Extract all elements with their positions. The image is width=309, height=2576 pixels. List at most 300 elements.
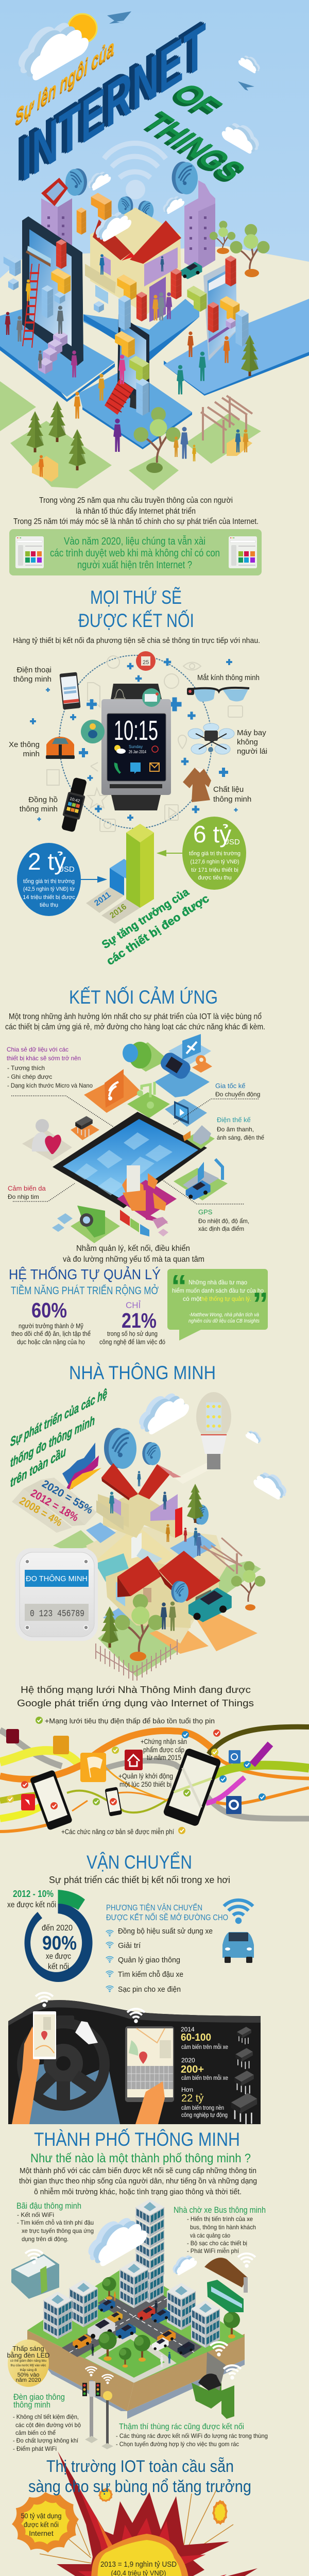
tower block — [135, 2199, 164, 2282]
year pad 2011 — [86, 887, 124, 913]
dotted arc — [59, 655, 212, 828]
rays — [40, 2490, 233, 2576]
list: vehicle benefits: Tìm kiếm chỗ đậu xe — [118, 1970, 183, 1979]
purple towers — [41, 180, 215, 319]
heading: everything connected — [78, 587, 194, 631]
caption: smart home growth: thống đo thông minh — [10, 1413, 95, 1470]
date: 26 Jan 2014 — [129, 750, 146, 754]
calendar circle: 25 — [143, 659, 149, 666]
title: Sự lên ngôi của — [15, 34, 114, 132]
low rise wide — [119, 2261, 164, 2308]
fence — [96, 1639, 177, 1681]
market figures: 2013 = 1,9 nghìn tỷ USD — [100, 2560, 177, 2569]
callout: 2 billion: (42,5 nghìn tỷ VNĐ) từ — [23, 886, 75, 892]
label: data sharing: - Ghi chép được — [7, 1073, 52, 1080]
title: THINGS: THINGS — [134, 108, 252, 187]
building back right — [167, 2283, 196, 2330]
wifi big symbol — [104, 143, 166, 199]
stat: 60 percent: dục hoặc cân nặng của họ — [17, 1338, 85, 1346]
ribbon notes: +Chứng nhận sản — [141, 1737, 187, 1745]
sensor stats: 2014 — [181, 2026, 195, 2033]
icon: fitness band — [59, 776, 89, 833]
cloud over home — [139, 1383, 189, 1437]
meter label: ĐO THÔNG MINH — [26, 1574, 88, 1583]
building front left — [43, 2292, 72, 2339]
screws — [25, 1560, 88, 1630]
ribbon notes: một lúc 250 thiết bị — [119, 1780, 171, 1788]
heading: connected vehicles: ĐƯỢC KẾT NỐI SẼ MỞ ĐƯỜNG CHO — [106, 1912, 228, 1922]
airplane 2 — [238, 81, 254, 91]
small blasts — [36, 2488, 252, 2576]
game tile — [154, 1050, 210, 1097]
label: smart trash: - Chọn tuyến đường hợp lý cho việc thu gom rác — [116, 2441, 239, 2448]
quote attribution: nghiên cứu dữ liệu của CB Insights — [188, 1318, 260, 1324]
stat: 60 percent: theo dõi chế độ ăn, lịch tập thể — [11, 1330, 91, 1337]
gold LED badge: Thấp sáng — [12, 2345, 44, 2352]
park — [85, 2330, 177, 2383]
label: skin sensor: Đo nhịp tim — [8, 1193, 39, 1200]
sensor stats: 22 tỷ — [181, 2093, 203, 2104]
dumpster — [192, 2352, 234, 2419]
ground — [0, 246, 309, 487]
label: smart parking: - Kết nối WiFi — [17, 2211, 54, 2218]
stat: 21 percent: công nghệ để làm việc đó — [99, 1338, 165, 1346]
small cloud city — [173, 2250, 197, 2277]
close quote: ” — [252, 1286, 268, 1322]
list: vehicle benefits — [106, 1927, 213, 1994]
ribbon notes: từ năm 2015 — [147, 1753, 181, 1761]
explosion — [8, 2451, 258, 2576]
benches — [32, 435, 252, 482]
label: smart watch — [20, 795, 58, 814]
label: accelerometer: Gia tốc kế — [215, 1082, 246, 1090]
title: OF: OF — [165, 78, 230, 122]
house centre — [85, 208, 181, 322]
smart city text: Một thành phố với các cảm biến được kết nối sẽ cung cấp những thông tin — [20, 2166, 256, 2175]
gold LED badge: năm 2020 — [16, 2377, 41, 2383]
sun — [68, 14, 97, 43]
donut chart: kết nối — [48, 1962, 69, 1971]
tiles lower — [52, 1213, 168, 1236]
label: accelerometer: Đo chuyển động — [215, 1091, 260, 1098]
stairs — [38, 331, 67, 374]
faint background icons — [47, 656, 243, 832]
stat: 60 percent: người trưởng thành ở Mỹ — [19, 1322, 83, 1330]
cloud over house — [96, 205, 131, 243]
market figures — [100, 2560, 177, 2576]
sensor stats: cảm biến trên mỗi xe — [181, 2074, 228, 2081]
open quote: “ — [171, 1269, 187, 1304]
road markings — [70, 2298, 194, 2352]
label: potentiometer — [217, 1116, 264, 1141]
phone icon — [114, 762, 121, 774]
deciduous tree — [134, 407, 180, 473]
list: vehicle benefits: Quản lý giao thông — [118, 1956, 180, 1964]
grass patches — [0, 381, 261, 490]
year pad 2016 — [101, 899, 140, 924]
meter digits: 0 123 456789 — [30, 1609, 84, 1619]
title: INTERNET — [16, 6, 206, 199]
quote text: hệ thống tự quản lý. — [201, 1295, 251, 1302]
caption: smart home growth — [10, 1386, 107, 1490]
tablet — [22, 216, 83, 366]
caption: smart home growth: trên toàn cầu — [10, 1444, 66, 1490]
label: smart traffic lights: Đèn giao thông — [13, 2392, 65, 2402]
left hand — [12, 2026, 40, 2124]
callout: 2 billion — [17, 843, 81, 916]
app tile stack — [120, 1210, 149, 1236]
stat bands: smart meter growth: 2008 = 4% — [18, 1495, 64, 1529]
heading: smart city: THÀNH PHỐ THÔNG MINH — [34, 2128, 240, 2150]
callout: 6 billion: (127,6 nghìn tỷ VNĐ) — [191, 859, 239, 865]
callout: 2 billion: tiêu thụ — [40, 902, 58, 908]
callout: 2 billion: USD — [58, 865, 75, 874]
right cloud — [222, 116, 259, 156]
cloud mid — [88, 167, 111, 192]
label: smart bus stop: - Hiển thị tiến trình của xe — [187, 2215, 253, 2223]
stat: 21 percent: trong số họ sử dụng — [107, 1330, 158, 1337]
heart tile — [22, 1119, 72, 1161]
lawns — [53, 1530, 261, 1677]
plus signs — [30, 658, 238, 821]
mail circle — [142, 688, 161, 707]
callout: 6 billion: 6 tỷ — [193, 821, 231, 848]
blue floor patches — [86, 1522, 216, 1625]
gold LED badge — [7, 2340, 50, 2387]
label: smart watch: Đồng hồ — [28, 795, 58, 804]
heading: transport: VẬN CHUYỂN — [87, 1851, 192, 1873]
label: smart traffic lights: cảm biến có thể — [15, 2429, 56, 2436]
label: GPS — [198, 1208, 249, 1232]
upper roofs — [101, 1463, 181, 1500]
street lamp — [101, 2391, 113, 2449]
blast callout: 50 billion: được kết nối — [24, 2520, 59, 2529]
home network text: Google phát triển ứng dụng vào Internet of Things — [17, 1698, 254, 1708]
light bulb — [175, 1392, 231, 1484]
trees top right — [210, 221, 270, 277]
label: potentiometer: Đo âm thanh, — [217, 1126, 254, 1133]
cloud city — [89, 2206, 147, 2269]
ribbon notes: +Quản lý khởi động — [118, 1772, 173, 1780]
house tile — [183, 1125, 215, 1149]
smart city text: ô nhiễm môi trường khác, hoặc tình trạng giao thông và thời tiết. — [34, 2188, 242, 2196]
ribbon notes: +Các chức năng cơ bản sẽ được miễn phí — [61, 1827, 174, 1836]
stat: 21 percent: CHỈ — [126, 1300, 141, 1310]
icon: smart fabric shirt — [183, 768, 211, 802]
calendar circle — [136, 651, 156, 671]
stat: 60 percent — [11, 1298, 91, 1346]
date — [129, 744, 146, 754]
teal car home — [188, 1587, 232, 1622]
chat tile — [123, 1042, 168, 1072]
title: THINGS: THINGS — [133, 109, 251, 188]
arrow: to 2016 bar — [158, 851, 182, 856]
list: vehicle benefits: Sạc pin cho xe điện — [118, 1985, 181, 1994]
smart meter panel — [15, 1548, 98, 1641]
small cloud right top — [238, 52, 260, 74]
building back left — [69, 2280, 98, 2327]
label: smart bus stop: bus, thông tin hành khách — [190, 2224, 256, 2231]
heading: self management: TIỀM NĂNG PHÁT TRIỂN RỘNG MỞ — [11, 1284, 159, 1297]
gold LED badge: 50% vào — [18, 2372, 39, 2378]
heading: smart home: NHÀ THÔNG MINH — [69, 1362, 216, 1383]
wifi parking — [25, 2250, 43, 2264]
label: smart traffic lights: các cột đèn đường với bộ — [15, 2421, 81, 2429]
right hand — [135, 2081, 165, 2124]
label: smart bus stop: - Bộ sạc cho các thiết bị — [187, 2240, 247, 2247]
label: smart bus stop — [174, 2205, 266, 2255]
icon: browser right — [229, 536, 257, 568]
sensor stats: 2020 — [181, 2057, 195, 2064]
label: drone: không — [237, 738, 258, 747]
watch time: 10:15 — [114, 715, 158, 746]
phone map — [33, 2011, 56, 2059]
icon: smart glasses — [187, 688, 249, 702]
rss tile — [84, 1069, 142, 1113]
heading: everything connected: ĐƯỢC KẾT NỐI — [78, 609, 194, 631]
label: smart car — [9, 740, 40, 758]
hero illustration — [0, 0, 309, 490]
label: smart traffic lights: - Điểm phát WiFi — [13, 2445, 57, 2452]
sensor intro text: các thiết bị cảm ứng giá rẻ, mở đường cho hàng loạt các chức năng khác đi kèm. — [5, 1023, 265, 1031]
sensor stats — [181, 2026, 228, 2119]
label: smartphone: Điện thoại — [16, 666, 52, 674]
sensor conclusion text — [63, 1243, 204, 1264]
icon: drone — [188, 723, 234, 754]
panel: 2020 question — [9, 529, 262, 575]
stat bands: smart meter growth: 2012 = 18% — [29, 1487, 80, 1524]
quote text: Những nhà đầu tư mạo — [188, 1279, 247, 1286]
heading: connected vehicles — [106, 1903, 228, 1922]
label: data sharing: thiết bị khác sẽ sớm trở nên — [7, 1055, 81, 1062]
chips — [231, 2027, 257, 2125]
label: GPS: GPS — [198, 1208, 213, 1216]
label: drone — [237, 728, 267, 756]
stat bands: smart meter growth: 2020 = 55% — [40, 1478, 95, 1516]
sensor stats: 200+ — [181, 2064, 204, 2075]
left platform — [0, 309, 115, 402]
icon: wifi large — [224, 1900, 253, 1924]
sensor conclusion text: và đo lường những yếu tố mà ta quan tâm — [63, 1255, 204, 1264]
white phone — [203, 260, 238, 361]
city trees — [98, 2277, 240, 2368]
intro text — [13, 496, 259, 526]
home network text: Hệ thống mạng lưới Nhà Thông Minh đang được — [21, 1685, 251, 1695]
heading: global IOT market: sàng cho sự bùng nổ tăng trưởng — [28, 2477, 251, 2496]
tetris blocks — [4, 193, 249, 416]
label: data sharing: - Tương thích — [7, 1064, 45, 1072]
callout: 6 billion: tổng giá trị thị trường — [189, 851, 241, 857]
blue platform top — [83, 299, 199, 361]
label: smart parking: Bãi đậu thông minh — [16, 2201, 81, 2211]
mini area chart — [62, 1443, 101, 1490]
label: smart traffic lights: thông minh — [13, 2400, 50, 2410]
user circle — [81, 720, 105, 743]
label: smart parking — [16, 2201, 94, 2243]
subheading: Hàng tỷ thiết bị kết nối đa phương tiện sẽ chia sẻ thông tin trực tiếp với nhau. — [13, 636, 260, 645]
label: smart fabric — [213, 785, 251, 804]
gold LED badge: bằng đèn LED — [7, 2351, 50, 2359]
people — [5, 254, 248, 477]
year pad 2016: 2016 — [108, 903, 128, 920]
gold LED badge: thụ của nước Mỹ vào việc — [11, 2364, 46, 2367]
gold LED badge: có thể giảm điện năng tiêu — [10, 2359, 46, 2363]
lower house — [106, 1551, 220, 1628]
quote attribution: -Matthew Wong, nhà phân tích và — [189, 1312, 259, 1318]
arrow: to 2011 bar — [81, 877, 106, 882]
sensor stats: cảm biến trên mỗi xe — [181, 2043, 228, 2050]
heading: self management: HỆ THỐNG TỰ QUẢN LÝ — [9, 1266, 161, 1282]
ribbons — [0, 1727, 309, 1832]
heading: global IOT market: Thị trường IOT toàn cầu sẵn — [46, 2457, 234, 2476]
stat: 21 percent: 21% — [122, 1309, 157, 1332]
mini car display — [57, 2015, 74, 2025]
label: potentiometer: Điện thế kế — [217, 1116, 251, 1124]
pine trees — [26, 335, 259, 470]
pergola — [201, 396, 252, 453]
wifi shelter — [238, 2253, 255, 2268]
heading: self management — [9, 1266, 161, 1297]
home network text — [17, 1685, 254, 1708]
label: smart trash: Thậm thí thùng rác cũng được kết nối — [119, 2422, 244, 2431]
callout: 2 billion: 2 tỷ — [28, 848, 66, 875]
speedometer — [75, 2021, 98, 2044]
label: smart trash: - Các thùng rác được kết nối WiFi đo lượng rác trong thùng — [116, 2432, 268, 2439]
caption: smart home growth: Sự phát triển của các hệ — [10, 1386, 107, 1450]
island top — [27, 2264, 245, 2383]
right platform — [164, 299, 309, 396]
label: smart fabric: Chất liệu — [213, 785, 244, 794]
shelf with books — [26, 246, 51, 267]
intro text: Trong 25 năm tới máy móc sẽ là nhân tố chính cho sự phát triển của Internet. — [13, 517, 259, 526]
steering wheel — [22, 2023, 105, 2107]
callout: 6 billion: từ 171 triệu thiết bị — [191, 867, 238, 873]
smart city text — [19, 2166, 257, 2196]
label: smart car: Xe thông — [9, 740, 40, 749]
label: smart traffic lights — [13, 2392, 81, 2452]
donut chart: xe được — [46, 1952, 71, 1961]
big cloud — [19, 9, 89, 84]
label: smart parking: dụng trên di động. — [22, 2235, 68, 2243]
label: skin sensor — [8, 1184, 46, 1200]
title: OF: OF — [162, 80, 227, 124]
donut chart: 2012 - 10% — [13, 1889, 54, 1899]
bus — [207, 2280, 244, 2312]
driver body — [12, 2063, 120, 2124]
bullet: low power mesh: +Mạng lưới tiêu thụ điện thấp để bảo tồn tuổi thọ pin — [45, 1717, 215, 1725]
caption: wearable growth: các thiết bị đeo được — [104, 892, 211, 968]
question text: Vào năm 2020, liệu chúng ta vẫn xài — [64, 535, 205, 547]
bell icon — [114, 689, 125, 699]
driveway — [149, 1610, 258, 1654]
red stairs — [105, 379, 134, 415]
label: smart glasses: Mắt kính thông minh — [197, 673, 260, 682]
list: vehicle benefits: Đồng bộ hiệu suất sử dụng xe — [118, 1927, 213, 1936]
city illustration — [7, 2199, 255, 2449]
wifi on traffic — [85, 2367, 113, 2384]
callout: 2 billion: tổng giá trị thị trường — [23, 878, 75, 885]
label: accelerometer — [215, 1082, 260, 1098]
quote text — [172, 1279, 264, 1302]
wifi discs on house — [171, 1504, 209, 1603]
callout: 2 billion: 14 triệu thiết bị được — [23, 894, 75, 901]
label: smart bus stop: và các quảng cáo — [190, 2232, 230, 2239]
sensor intro text — [5, 1012, 265, 1031]
list: vehicle benefits: Giải trí — [118, 1941, 141, 1950]
phones — [29, 1748, 221, 1831]
donut chart: 90% — [42, 1933, 77, 1954]
camera tile — [71, 1206, 120, 1243]
bar 2016 — [126, 824, 154, 908]
label: data sharing: Chia sẻ dữ liệu với các — [7, 1046, 68, 1053]
wifi on dumpster — [210, 2342, 241, 2380]
sensor stats: 60-100 — [181, 2032, 211, 2043]
label: potentiometer: ánh sáng, điện thế — [217, 1134, 264, 1141]
traffic light — [82, 2380, 100, 2443]
sensor stats: cảm biến trong nền — [181, 2104, 224, 2111]
label: smart bus stop: - Phát WiFi miễn phí — [187, 2247, 239, 2255]
label: smart parking: - Tìm kiếm chỗ và tính phí đậu — [17, 2218, 94, 2226]
subheading: smart city question: Như thế nào là một thành phố thông minh ? — [30, 2151, 251, 2165]
sensor conclusion text: Nhằm quản lý, kết nối, điều khiển — [76, 1243, 190, 1253]
quote text: hiểm muốn danh sách đầu tư của họ — [172, 1287, 264, 1294]
pergola home — [198, 1538, 242, 1574]
mail icon — [150, 763, 159, 771]
parking building — [11, 2254, 59, 2299]
tablet — [53, 1112, 207, 1208]
central phone — [117, 314, 149, 412]
gold LED badge: thắp sáng đi — [20, 2368, 37, 2372]
cloud right home — [253, 1466, 286, 1501]
label: smart traffic lights: - Không chỉ tiết kiệm điện, — [13, 2413, 79, 2420]
pine home — [101, 1484, 203, 1648]
vehicles — [73, 2299, 195, 2355]
stat bands: smart meter growth — [12, 1478, 97, 1533]
isometric house — [53, 1463, 265, 1681]
floor plan — [86, 1525, 227, 1643]
check marks — [7, 1730, 266, 1834]
icon: fitness band: 10:42 — [70, 796, 81, 803]
sensor illustration — [22, 1034, 228, 1243]
sensor stats: Hơn — [181, 2086, 193, 2093]
explosion core — [91, 2534, 190, 2576]
label: smart trash — [116, 2422, 268, 2448]
label: GPS: Đo nhiệt độ, độ ẩm, — [198, 1217, 249, 1225]
video tile — [165, 1099, 207, 1127]
weather icon — [114, 745, 126, 754]
question text — [50, 535, 220, 571]
callout: 6 billion: được tiêu thụ — [198, 875, 232, 881]
central platform — [79, 372, 192, 449]
callout: investor quote — [167, 1269, 268, 1341]
label: drone: Máy bay — [237, 728, 266, 737]
smart city text: thời gian thực theo nhịp sống của người dân, như tiếng ồn và những dạng — [19, 2177, 257, 2185]
car tile — [174, 1159, 228, 1200]
label: smart fabric: thông minh — [213, 795, 251, 804]
music tile — [127, 1082, 170, 1118]
quote attribution — [188, 1312, 260, 1324]
sensor intro text: Một trong những ảnh hưởng lớn nhất cho sự phát triển của IOT là việc bùng nổ — [9, 1012, 262, 1021]
date: Sunday — [129, 744, 143, 749]
meter digits — [25, 1604, 89, 1621]
dotted leader lines — [11, 1096, 259, 1204]
question text: người xuất hiện trên Internet ? — [77, 560, 192, 571]
label: data sharing — [7, 1046, 93, 1089]
title: THINGS: THINGS — [136, 107, 254, 186]
donut chart — [7, 1889, 93, 1982]
blast callout: 50 billion — [12, 2492, 79, 2553]
bus shelter — [204, 2258, 248, 2293]
